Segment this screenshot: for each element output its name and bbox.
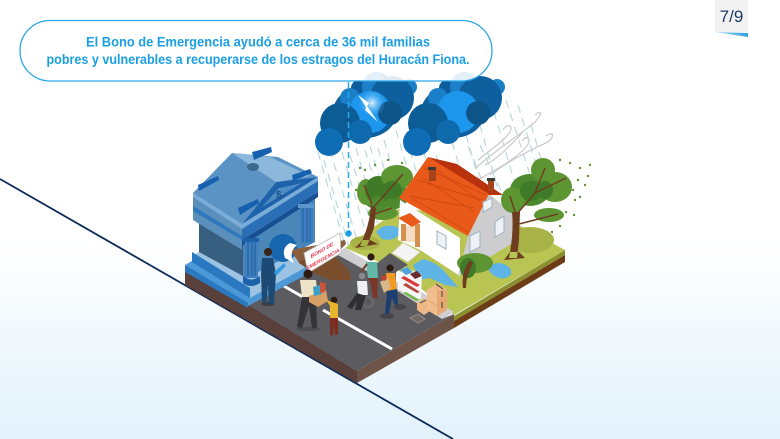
road <box>248 253 454 371</box>
blowing leaves <box>355 159 591 233</box>
tree left <box>355 165 413 248</box>
page number tab <box>715 0 748 37</box>
heading callout: pobres y vulnerables a recuperarse de los estragos del Huracán Fiona. <box>46 51 470 67</box>
cloud left <box>315 72 417 156</box>
sign Bono de Emergencia: EMERGENCIA <box>307 248 339 272</box>
heading callout: El Bono de Emergencia ayudó a cerca de 36 mil familias <box>86 34 430 50</box>
diagonal line <box>0 179 453 439</box>
grass <box>345 208 565 315</box>
columns <box>245 240 258 278</box>
wind swirls <box>474 112 552 182</box>
sidewalk <box>332 248 382 280</box>
market stall <box>398 267 422 301</box>
sign Bono de Emergencia: BONO DE <box>311 241 334 260</box>
dashed connector <box>345 82 352 237</box>
person: wheelchair user and attendant <box>347 253 378 310</box>
rain <box>318 100 552 250</box>
bank <box>185 147 318 308</box>
isometric platform <box>185 208 565 383</box>
cloud right <box>403 72 505 156</box>
puddles <box>376 226 511 287</box>
person: man with groceries <box>380 264 406 319</box>
sign Bono de Emergencia <box>304 233 341 273</box>
roof <box>193 153 318 224</box>
bank: $ <box>276 190 282 201</box>
page number tab: 7/9 <box>720 7 743 26</box>
house <box>392 157 513 276</box>
manhole <box>410 314 425 323</box>
person: child <box>326 297 338 336</box>
person: woman with tablet <box>261 248 286 306</box>
tree right <box>501 158 572 260</box>
brown arm and mud <box>284 240 351 280</box>
lightning <box>358 95 378 122</box>
stacked boxes <box>417 283 447 316</box>
roof tabs <box>198 147 312 215</box>
tunnel <box>269 234 297 262</box>
heading callout <box>20 20 492 81</box>
shrub <box>457 253 493 288</box>
person: man with box <box>296 270 328 331</box>
